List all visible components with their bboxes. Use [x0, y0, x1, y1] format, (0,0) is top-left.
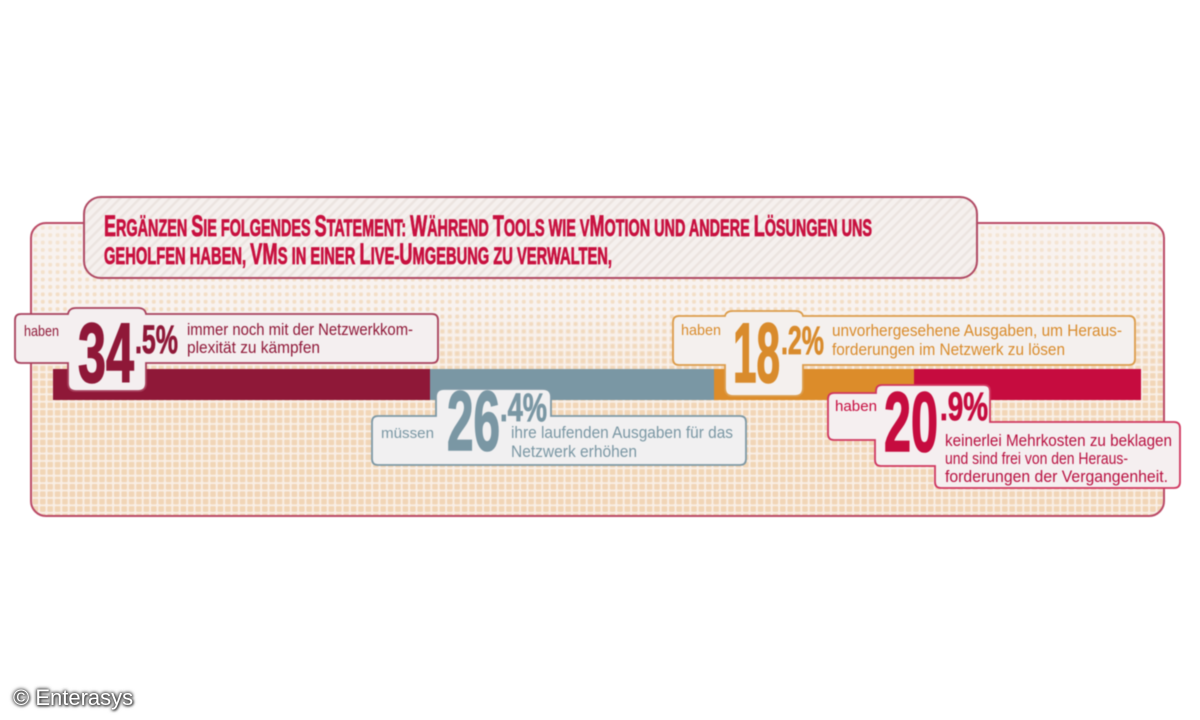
callout: 26.4%: ihre laufenden Ausgaben für das [511, 423, 733, 442]
callout: 34.5% [15, 306, 438, 400]
callout: 20.9%: forderungen der Vergangenheit. [945, 467, 1168, 486]
callout: 18.2%: forderungen im Netzwerk zu lösen [832, 340, 1065, 359]
infographic [13, 195, 1182, 518]
bar segment 18.2% [714, 369, 914, 400]
callout: 26.4%: 26 [447, 374, 500, 468]
callout: 20.9%: keinerlei Mehrkosten zu beklagen [945, 431, 1172, 450]
callout: 26.4%: .4% [500, 386, 547, 430]
bar segment 34.5% [53, 369, 430, 400]
callout: 26.4%: Netzwerk erhöhen [511, 442, 637, 461]
callout: 18.2%: 18 [733, 306, 780, 400]
stacked bar [53, 369, 1141, 400]
callout: 20.9% [828, 375, 1180, 488]
callout: 18.2% [673, 306, 1135, 400]
callout: 20.9%: haben [835, 398, 877, 415]
callout: 18.2%: unvorhergesehene Ausgaben, um Heraus- [832, 321, 1122, 340]
callout: 34.5%: plexität zu kämpfen [187, 338, 320, 357]
callout: 18.2%: haben [681, 322, 721, 339]
panel: dotted background [31, 223, 1164, 516]
callout: 20.9%: und sind frei von den Heraus- [945, 449, 1128, 468]
callout: 26.4% [372, 374, 746, 468]
heading line 1: ERGÄNZEN SIE FOLGENDES STATEMENT: WÄHREND TOOLS WIE VMOTION UND ANDERE LÖSUNGEN UNS [104, 210, 872, 243]
callout: 20.9%: 20 [884, 375, 938, 469]
copyright credit: © Enterasys [13, 685, 133, 710]
callout: 34.5%: 34 [78, 306, 134, 400]
heading box [84, 197, 977, 278]
bar segment 26.4% [430, 369, 714, 400]
callout: 18.2%: .2% [781, 319, 824, 363]
callout: 34.5%: haben [24, 323, 59, 340]
callout: 26.4%: müssen [381, 425, 434, 442]
callout: 34.5%: .5% [135, 318, 178, 362]
heading line 2: GEHOLFEN HABEN, VMS IN EINER LIVE-UMGEBUNG ZU VERWALTEN, [104, 238, 612, 271]
callout: 34.5%: immer noch mit der Netzwerkkom- [187, 320, 413, 339]
bar segment 20.9% [914, 369, 1141, 400]
callout: 20.9%: .9% [940, 385, 988, 429]
